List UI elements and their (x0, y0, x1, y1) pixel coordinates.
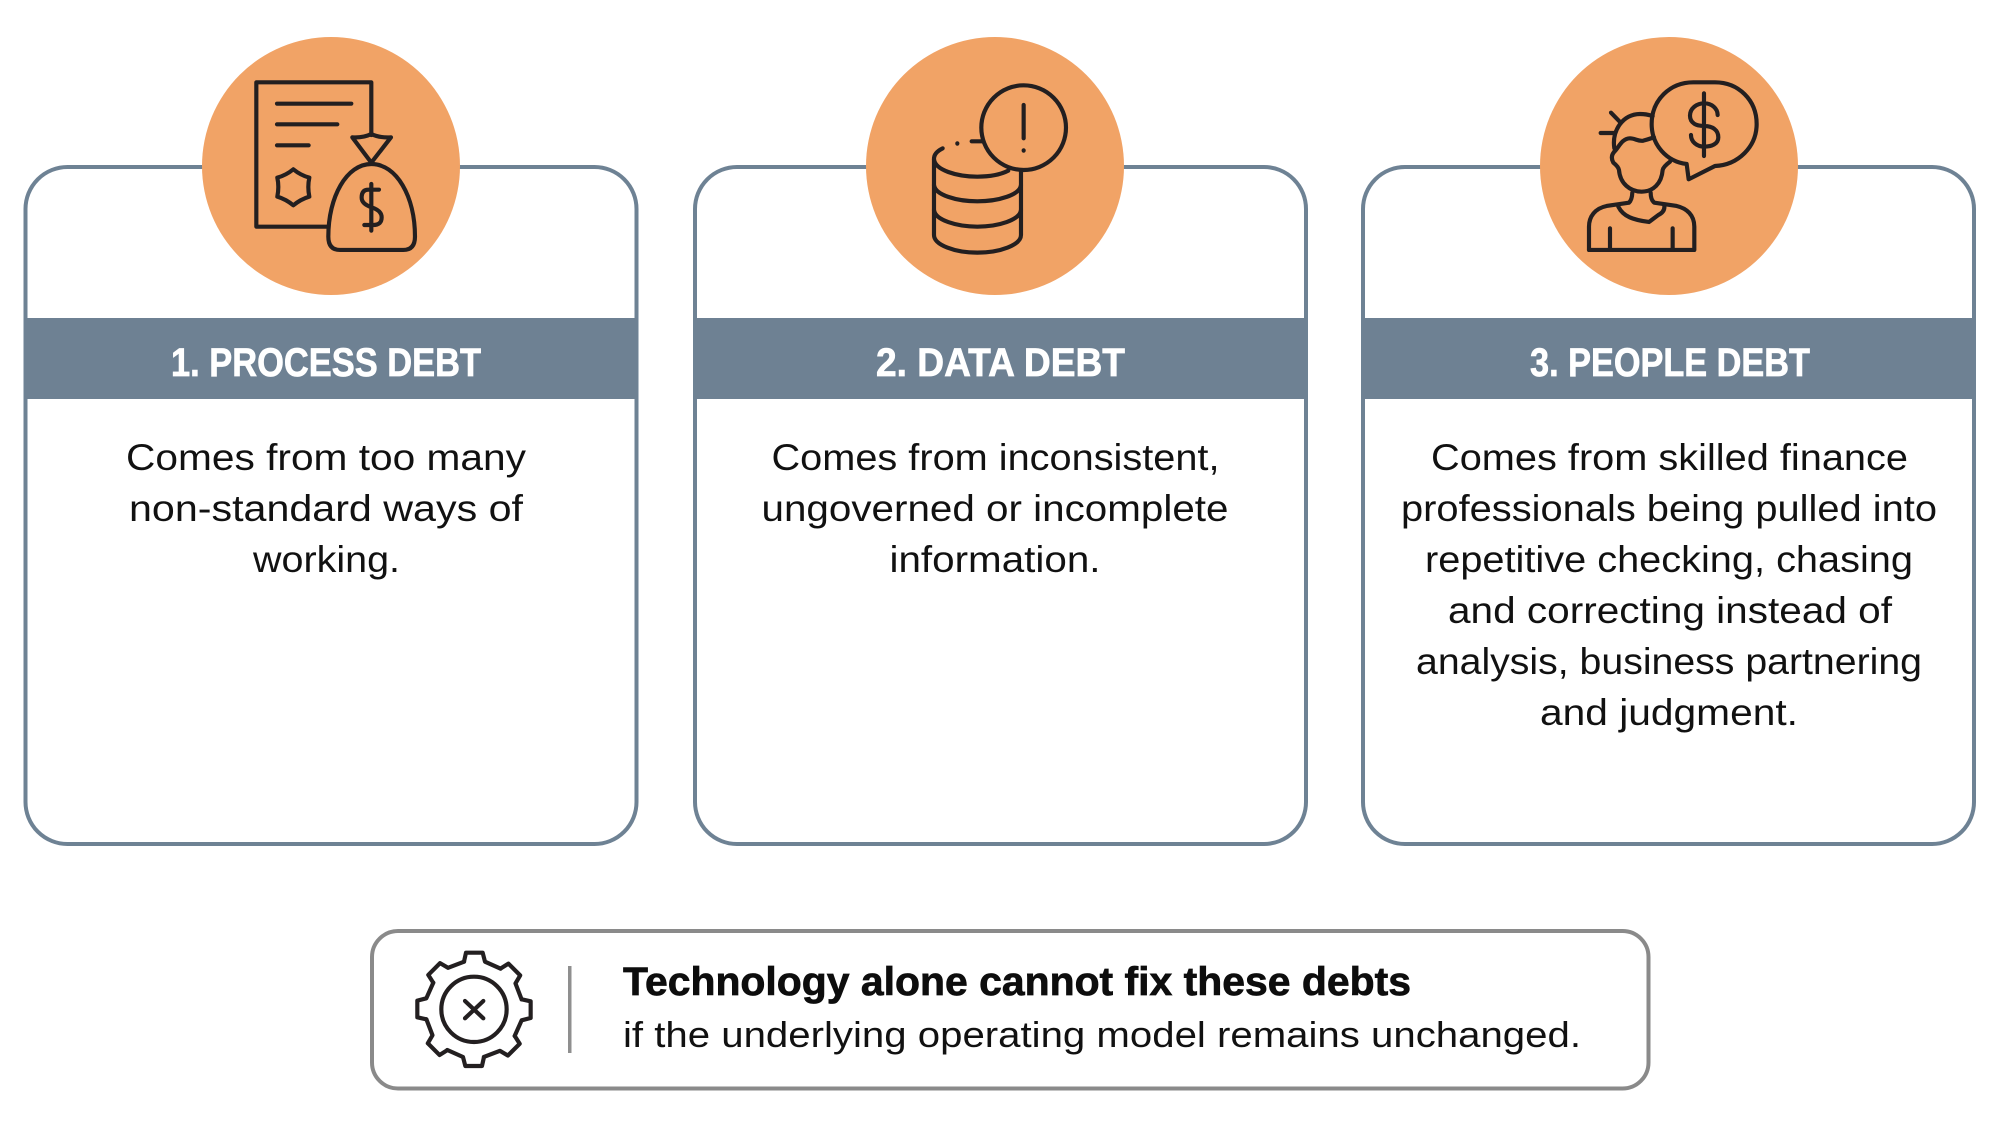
body text: and correcting instead of (1448, 590, 1893, 631)
heading band (25, 318, 637, 399)
heading: process debt: 1. PROCESS DEBT (171, 341, 481, 385)
body text: analysis, business partnering (1416, 641, 1922, 682)
heading band (694, 318, 1306, 399)
body text (762, 437, 1228, 580)
icon: document and money bag (256, 82, 415, 250)
body text: information. (890, 539, 1100, 580)
callout box (372, 931, 1648, 1088)
panel: process debt (25, 37, 637, 844)
callout: technology alone cannot fix these debts (372, 931, 1648, 1088)
body text: Comes from too many (126, 437, 527, 478)
body text: Comes from inconsistent, (772, 437, 1220, 478)
panel: people debt (1362, 37, 1974, 844)
body text: Comes from skilled finance (1431, 437, 1908, 478)
divider (568, 966, 572, 1053)
heading: people debt: 3. PEOPLE DEBT (1530, 341, 1810, 385)
body text: working. (252, 539, 400, 580)
body text (126, 437, 527, 580)
icon circle (866, 37, 1124, 295)
icon circle (202, 37, 460, 295)
panel: data debt (694, 37, 1306, 844)
icon circle (1540, 37, 1798, 295)
card outline (26, 167, 636, 844)
body text (1401, 437, 1937, 733)
icon: person with dollar speech bubble (1589, 82, 1757, 250)
body text: and judgment. (1540, 692, 1798, 733)
icon: gear with x (415, 950, 533, 1068)
icon: database with alert (934, 85, 1066, 253)
body text: non-standard ways of (129, 488, 524, 529)
callout subtext: if the underlying operating model remains unchanged. (623, 1014, 1581, 1055)
heading band (1362, 318, 1974, 399)
body text: professionals being pulled into (1401, 488, 1937, 529)
body text: ungoverned or incomplete (762, 488, 1228, 529)
card outline (695, 167, 1306, 844)
heading: data debt: 2. DATA DEBT (876, 341, 1125, 385)
body text: repetitive checking, chasing (1425, 539, 1913, 580)
card outline (1363, 167, 1974, 844)
callout heading: Technology alone cannot fix these debts (623, 960, 1411, 1004)
